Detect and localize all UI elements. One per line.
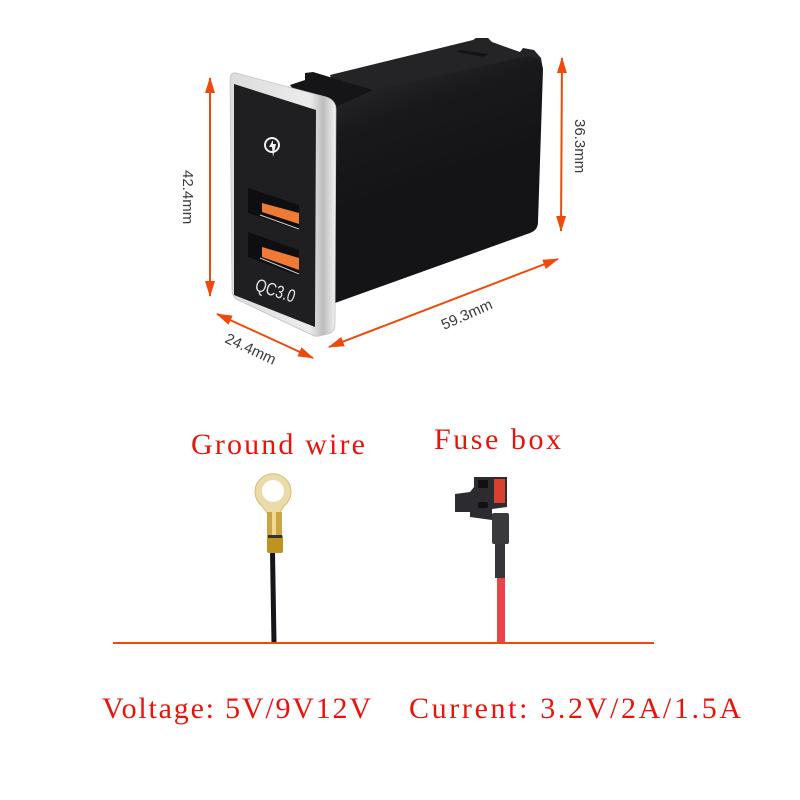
black face panel bbox=[234, 84, 316, 327]
top slot bbox=[457, 50, 488, 57]
ground wire ring terminal bbox=[255, 474, 291, 643]
dimension: 59.3mm: 59.3mm bbox=[439, 296, 495, 334]
dimension: 24.4mm bbox=[217, 314, 313, 369]
ring terminal bbox=[255, 474, 291, 514]
blade fuse bbox=[494, 479, 505, 503]
dimension: 42.4mm: 42.4mm bbox=[179, 170, 196, 224]
silver bezel bbox=[230, 73, 336, 336]
fuse tap bbox=[455, 477, 509, 643]
dimension: 59.3mm bbox=[329, 259, 558, 347]
module top face bbox=[330, 38, 543, 108]
QC3.0 label: QC3.0 bbox=[253, 275, 298, 306]
fuse slots bbox=[478, 480, 488, 488]
dimension: 24.4mm: 24.4mm bbox=[222, 330, 279, 369]
USB port 2 bbox=[248, 232, 299, 276]
heading: fuse box: Fuse box bbox=[434, 423, 561, 456]
ring hole bbox=[262, 480, 284, 502]
shrink collar bbox=[492, 513, 509, 544]
USB port 1 bbox=[248, 188, 299, 230]
quick charge icon bbox=[265, 138, 279, 157]
red wire bbox=[497, 577, 505, 643]
top latch bbox=[290, 72, 373, 106]
charger module bbox=[230, 38, 543, 336]
baseline bbox=[113, 642, 654, 644]
dimension: 36.3mm: 36.3mm bbox=[571, 119, 588, 173]
crimp collar bbox=[267, 535, 283, 553]
heat shrink bbox=[495, 543, 505, 578]
voltage spec: Voltage: 5V/9V12V bbox=[102, 692, 371, 725]
fuse holder body bbox=[455, 477, 507, 520]
black wire bbox=[272, 552, 274, 643]
barrel highlight bbox=[272, 512, 276, 536]
heading: ground wire: Ground wire bbox=[191, 428, 365, 461]
current spec: Current: 3.2V/2A/1.5A bbox=[409, 692, 741, 725]
collar shadow bbox=[268, 535, 282, 538]
crimp barrel bbox=[267, 512, 282, 536]
module side body bbox=[335, 57, 543, 303]
